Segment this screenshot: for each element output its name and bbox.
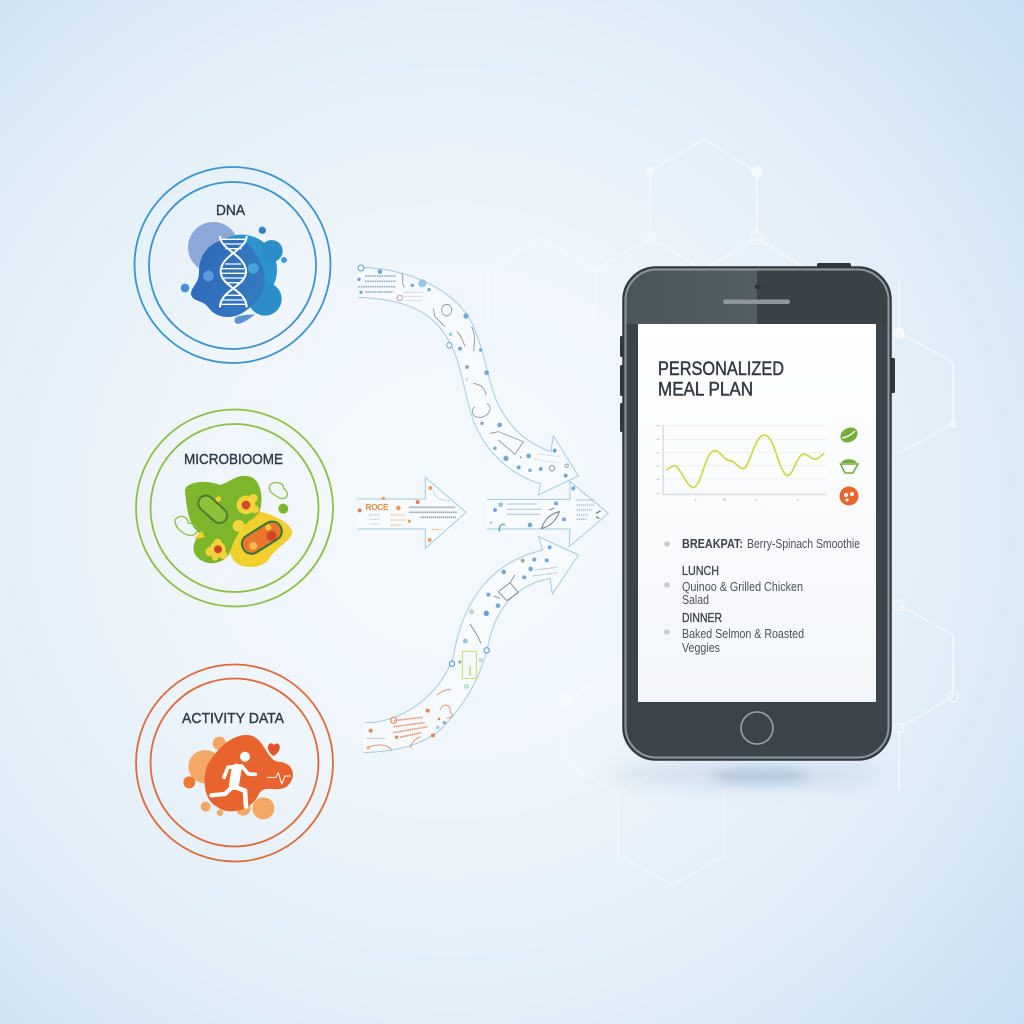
phone mockup — [620, 263, 895, 760]
icon: microbiome blob — [175, 476, 292, 567]
arrow: top curved data flow — [357, 265, 578, 495]
phone side buttons — [620, 263, 895, 432]
DNA label: DNA — [216, 202, 245, 219]
screen title: PERSONALIZED — [658, 359, 784, 380]
icon: DNA blob and helix — [181, 222, 287, 324]
icon: orange food badge — [840, 486, 858, 506]
breakfast item: Berry-Spinach Smoothie — [747, 537, 860, 551]
activity rings — [136, 664, 333, 862]
arrow: merged flow into phone — [487, 482, 608, 547]
microbiome label: MICROBIOOME — [184, 451, 283, 468]
arrow: lower curved data flow — [363, 537, 578, 753]
panel: microbiome input — [136, 410, 333, 606]
dinner item: Veggies — [682, 641, 720, 655]
phone screen — [638, 324, 876, 702]
arrow caption: ROCE — [366, 502, 389, 512]
background hexagon network — [488, 139, 958, 885]
screen title — [658, 359, 784, 400]
microbiome rings — [136, 410, 333, 606]
dinner item: Baked Selmon & Roasted — [682, 627, 804, 641]
phone shadow — [610, 762, 880, 786]
panel: activity data input — [136, 664, 333, 862]
home button — [741, 712, 773, 744]
panel: DNA input — [134, 167, 330, 363]
DNA rings — [134, 167, 330, 363]
dinner item: DINNER — [682, 611, 722, 625]
activity label: ACTIVITY DATA — [182, 710, 284, 727]
icon: leaf — [838, 424, 860, 446]
meal list — [664, 537, 860, 655]
phone speaker — [723, 300, 790, 304]
arrow: microbiome straight flow — [357, 477, 466, 548]
lunch item — [664, 564, 803, 607]
phone body — [623, 267, 891, 760]
line chart — [657, 425, 827, 500]
lunch item: Quinoo & Grilled Chicken — [682, 580, 803, 594]
icon: runner blob — [183, 735, 293, 819]
phone camera — [755, 284, 761, 290]
lunch item: Salad — [682, 593, 709, 607]
screen title: MEAL PLAN — [658, 380, 753, 400]
breakfast item — [664, 537, 860, 551]
breakfast item: BREAKPAT: — [682, 537, 743, 551]
icon: salad bowl — [840, 459, 858, 473]
lunch item: LUNCH — [682, 564, 719, 578]
dinner item — [664, 611, 804, 655]
